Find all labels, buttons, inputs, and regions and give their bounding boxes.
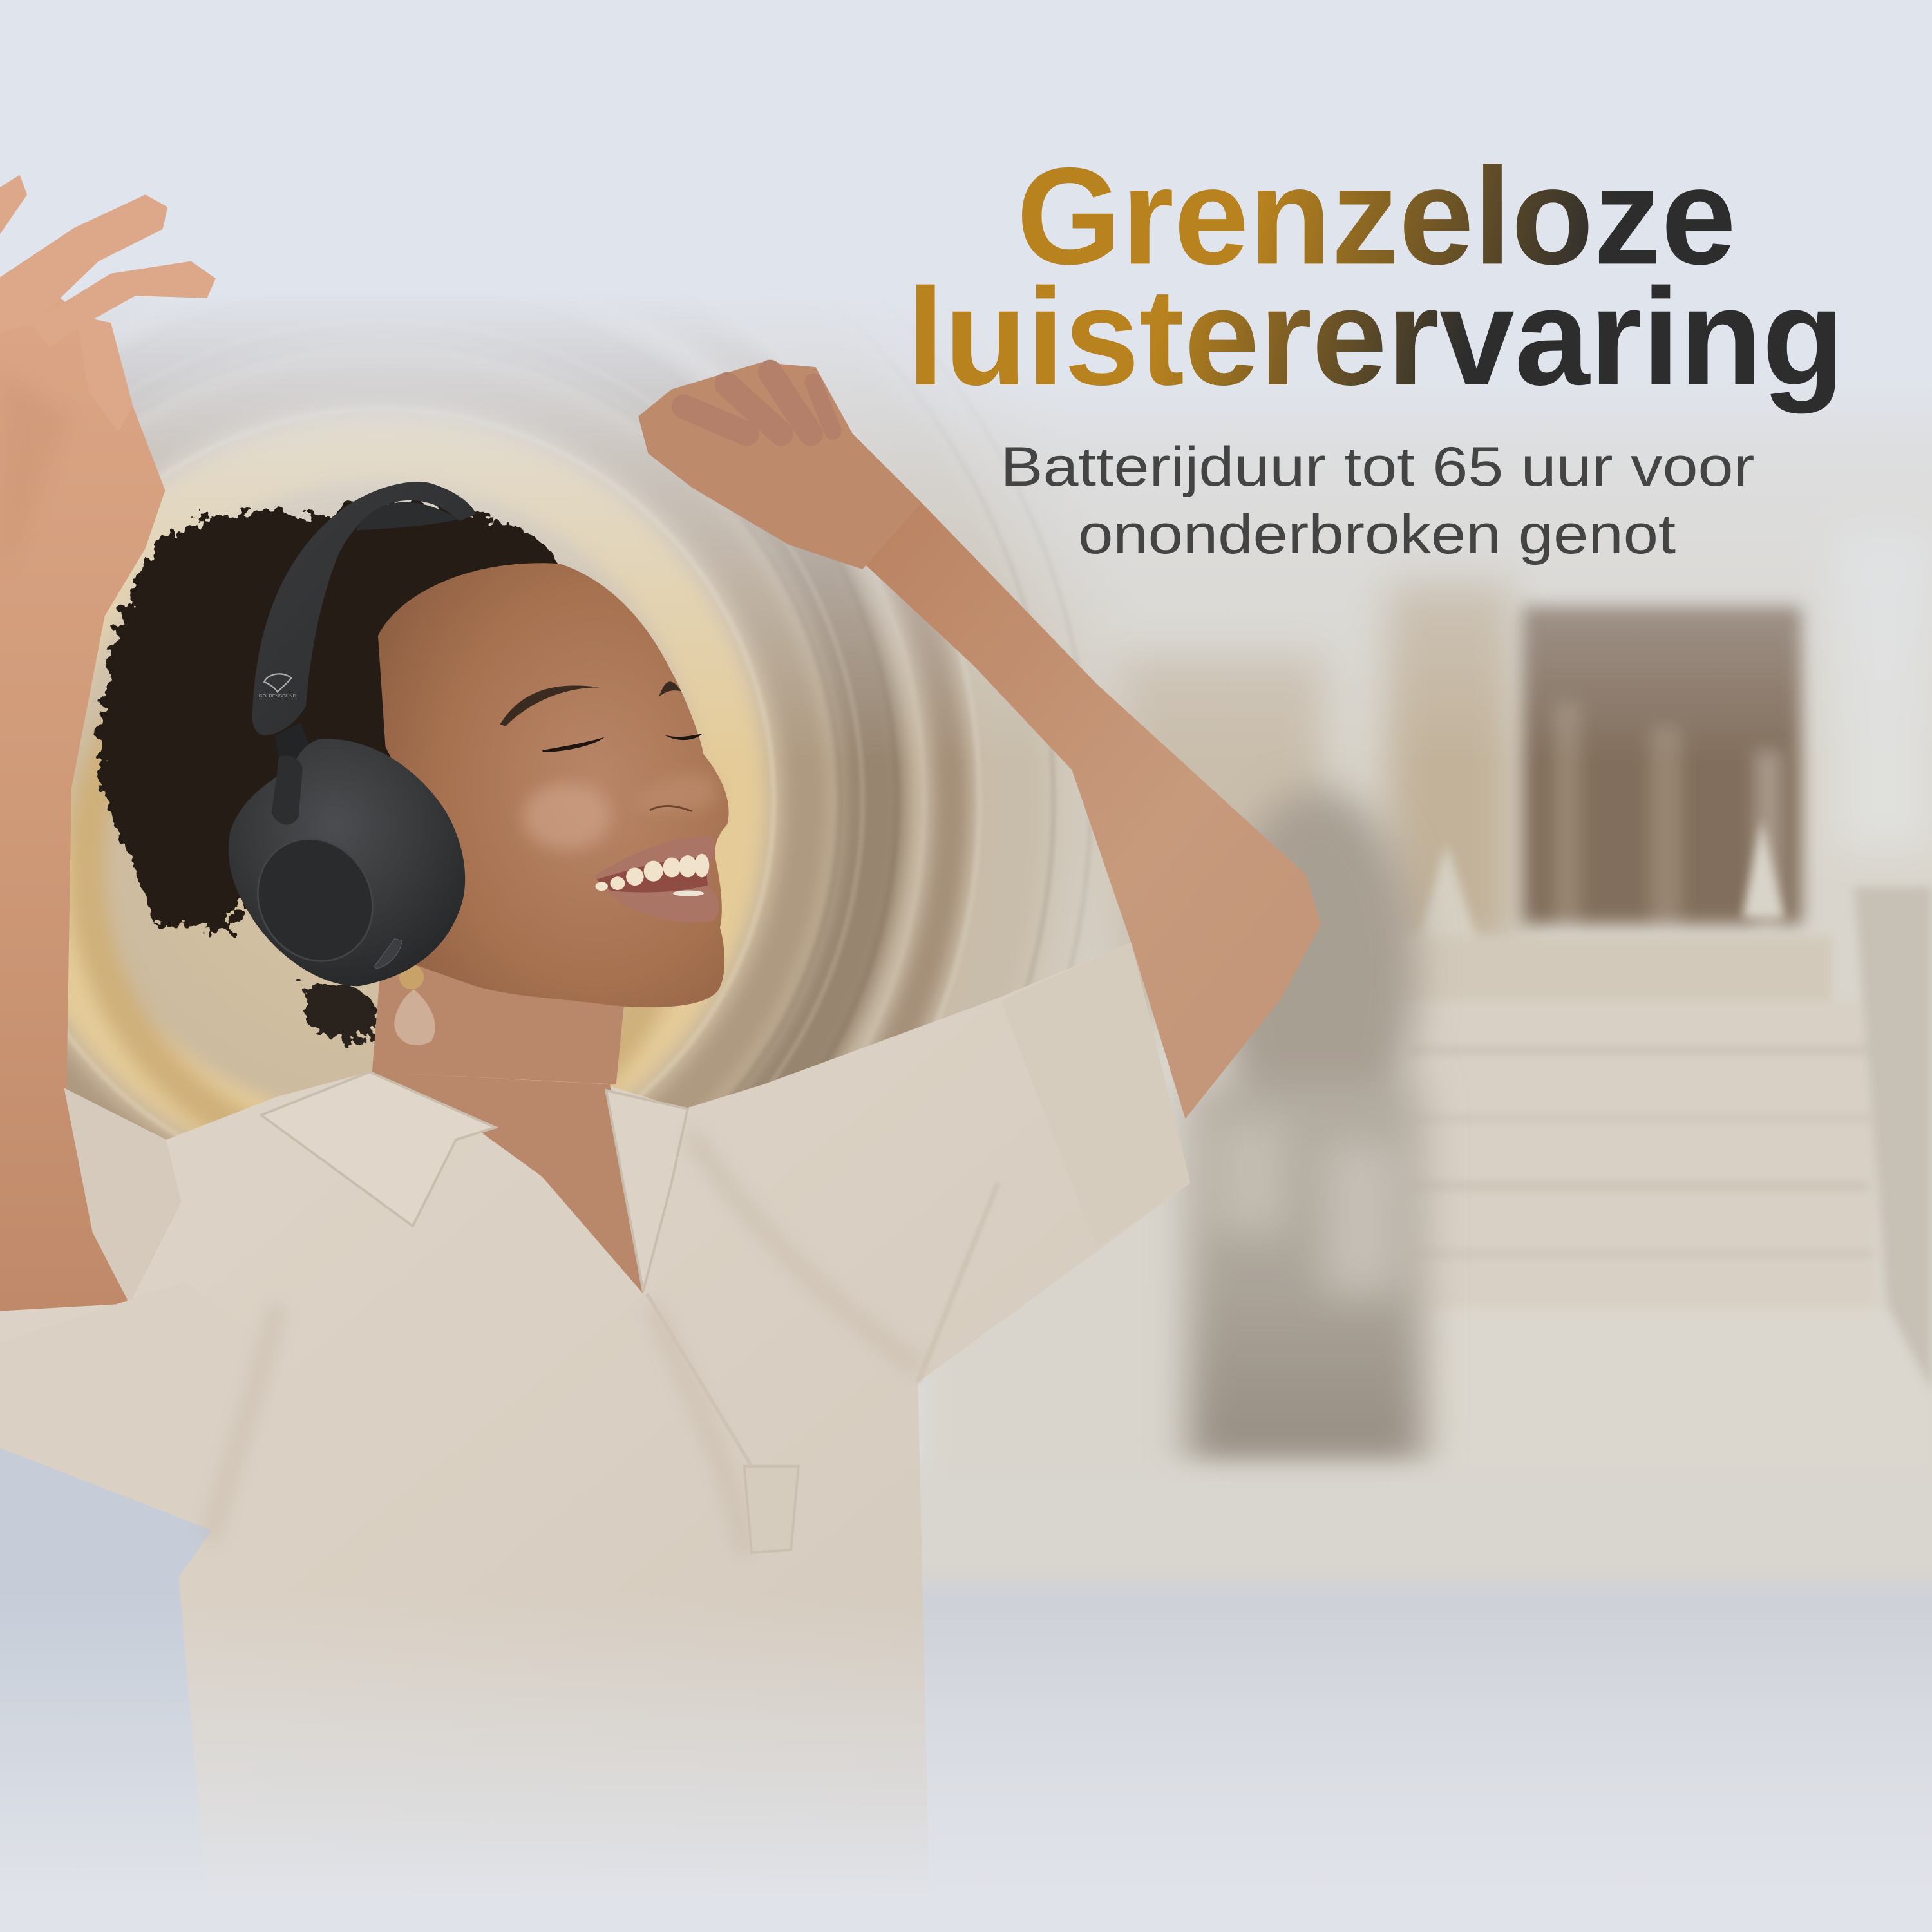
hair	[100, 504, 569, 1045]
road	[862, 1584, 1932, 1932]
subtitle line 2: ononderbroken genot	[1078, 504, 1676, 565]
cheek highlight	[522, 784, 611, 850]
left lower sky panel	[0, 1429, 247, 1932]
concentric sound rings	[0, 12, 1171, 1589]
headphones	[229, 482, 476, 986]
left arm and raised hand	[0, 175, 216, 1311]
arm shading	[0, 370, 74, 579]
face	[378, 563, 729, 1007]
top fade	[0, 0, 1932, 764]
headband	[252, 482, 476, 735]
arm overlay	[272, 755, 303, 825]
button	[374, 939, 402, 969]
shirt	[0, 943, 1190, 1932]
nose shading	[629, 774, 717, 811]
lower teeth	[673, 891, 704, 896]
subtitle	[1001, 436, 1754, 565]
placket	[744, 1466, 799, 1553]
headband inner	[356, 502, 459, 530]
bottom fade	[0, 1589, 1932, 1932]
ledge and striped wall	[1395, 819, 1932, 1524]
subtitle line 1: Batterijduur tot 65 uur voor	[1001, 436, 1754, 498]
shirt right collar	[606, 1090, 688, 1291]
pavement	[862, 1466, 1932, 1596]
round plate	[236, 818, 395, 982]
left eye	[542, 737, 604, 752]
blurred tree	[1189, 788, 1423, 1466]
right sleeve cuff	[1001, 943, 1190, 1247]
logo: GOLDENSOUND	[259, 693, 297, 699]
fine ring streaks	[0, 92, 1090, 1510]
left sleeve band	[0, 1282, 269, 1530]
neck opening	[372, 1072, 643, 1294]
teeth	[595, 854, 709, 891]
right hand fingers	[684, 372, 833, 433]
fold shadows	[209, 1133, 918, 1553]
title line 2: luisterervaring	[907, 260, 1844, 414]
left hand fingers	[0, 175, 216, 431]
hinge arm	[272, 723, 308, 831]
lips	[594, 835, 719, 923]
neck	[372, 949, 629, 1084]
building facade	[912, 406, 1932, 1540]
title line 1: Grenzeloze	[1016, 139, 1736, 293]
left eyebrow	[500, 685, 600, 726]
logo	[259, 674, 297, 699]
mouth interior	[596, 857, 708, 892]
head	[378, 563, 729, 1007]
title	[907, 139, 1844, 414]
right eye	[665, 734, 703, 740]
right arm and raised hand	[638, 362, 1321, 1119]
dark doorway	[1523, 606, 1801, 924]
earring	[394, 965, 435, 1045]
right eyebrow	[659, 681, 681, 697]
inner sleeve	[64, 1088, 181, 1303]
shirt collar	[261, 1072, 495, 1226]
ear cup	[229, 739, 465, 986]
